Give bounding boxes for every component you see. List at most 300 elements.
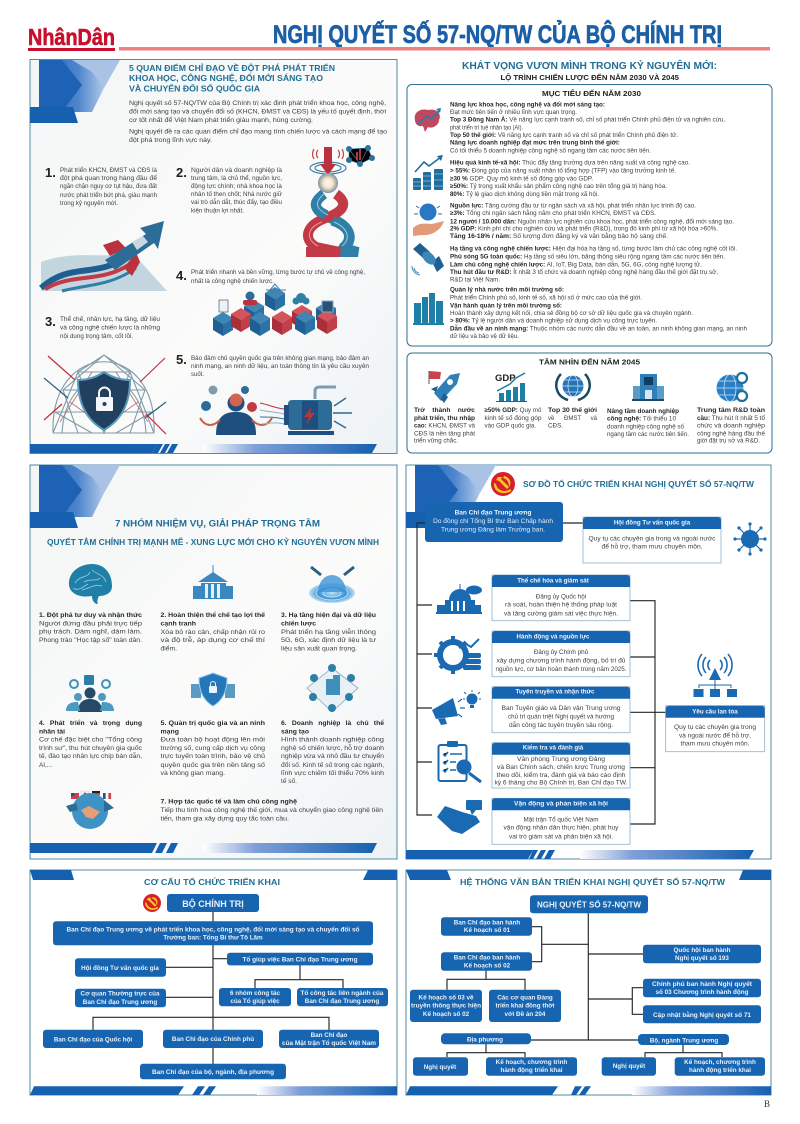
footer banner	[30, 444, 377, 453]
vision 1: Trở thành nước	[414, 407, 476, 414]
illustration: dome shield	[44, 355, 166, 434]
point 1: Phát triển KHCN, ĐMST và CĐS là	[60, 167, 158, 174]
box: Ban Chỉ đạo Trung ương: Ban Chỉ đạo Trung ương về phát triển khoa học, công nghệ, đổi mới sáng tạo và chuyển đổi số	[66, 925, 360, 934]
box: vận động: vận động nhân dân thực hiện, phát huy	[504, 825, 619, 832]
task 3: 5G, 6G, xác định dữ liệu là tư	[281, 637, 376, 644]
vision 2: ≥50% GDP: Quy mô	[484, 407, 542, 414]
point 2	[176, 165, 283, 214]
box: hành động: nguồn lực, cơ bản hoàn thành trong năm 2025.	[496, 664, 627, 673]
point 3: và công nghệ chiến lược là những	[60, 326, 160, 332]
box: kiểm tra: kỳ 6 tháng cho Bộ Chính trị, Ban Chỉ đạo TW.	[494, 778, 628, 786]
box: tuyên truyền	[492, 687, 630, 733]
box: Hội đồng Tư vấn	[75, 958, 166, 977]
text: hạ tầng: Phủ sóng 5G toàn quốc: Hạ tầng số siêu lớn, băng thông siêu rộng ngang tầm các nước tiên tiến.	[450, 253, 725, 260]
box: Các cơ quan Đảng	[489, 990, 561, 1022]
box: tuyên truyền: Ban Tuyên giáo và Dân vận Trung ương	[502, 705, 621, 712]
intro text: cơ tốt nhất để Việt Nam phát triển giàu mạnh, hùng cường.	[129, 115, 313, 124]
box: 6 nhóm công tác: của Tổ giúp việc	[230, 997, 280, 1005]
box: thể chế hóa: và tăng cường giám sát việc thực hiện.	[504, 611, 618, 618]
text: năng lực khoa học: Top 50 thế giới: Về năng lực cạnh tranh số và chỉ số phát triển Chính phủ điện tử.	[450, 132, 678, 139]
box: yêu cầu lan tỏa: và ngoài nước để hỗ trợ,	[679, 731, 751, 740]
point 3: Thể chế, nhân lực, hạ tầng, dữ liệu	[60, 316, 160, 323]
illustration: helix and network	[306, 145, 375, 252]
footer banner	[30, 843, 377, 853]
point 4: nhất là công nghệ chiến lược.	[191, 279, 274, 285]
box: vận động	[492, 798, 630, 844]
box: Bộ ngành Trung ương	[638, 1034, 729, 1045]
card: tầm nhìn 2045	[407, 353, 772, 453]
box: Tổ giúp việc	[227, 953, 373, 965]
box: kiểm tra: Văn phòng Trung ương Đảng	[517, 756, 606, 763]
point 3	[45, 314, 160, 340]
heading: tầm nhìn 2045: TẦM NHÌN ĐẾN NĂM 2045	[539, 356, 640, 366]
text: nguồn lực: 2% GDP: Kinh phí chi cho nghiên cứu và phát triển (R&D), trong đó kinh phí từ xã hội hóa >60%.	[450, 225, 718, 232]
text: nguồn lực: Nguồn lực: Tăng cường đầu tư từ ngân sách và xã hội, phát triển nhân lực trình độ cao.	[450, 202, 696, 209]
box: Hội đồng Tư vấn quốc gia: để hỗ trợ, tham mưu chuyên môn.	[602, 542, 703, 551]
box: Ban Chỉ đạo của Mặt trận	[279, 1030, 379, 1048]
box: Các cơ quan Đảng: triển khai đồng thời	[495, 1001, 555, 1010]
box: Nghị quyết bộ ngành	[602, 1057, 656, 1076]
panel: 7 nhóm nhiệm vụ	[30, 465, 397, 859]
heading: sơ đồ tổ chức: SƠ ĐỒ TỔ CHỨC TRIỂN KHAI NGHỊ QUYẾT SỐ 57-NQ/TW	[523, 479, 755, 489]
task 2: và độ trễ, áp dụng cơ chế thí	[160, 637, 265, 644]
vision 4: doanh nghiệp công nghệ số	[607, 423, 685, 430]
box: Tổ giúp việc: Tổ giúp việc Ban Chỉ đạo Trung ương	[242, 955, 358, 963]
box: Ban Chỉ đạo của Quốc hội: Ban Chỉ đạo của Quốc hội	[54, 1036, 132, 1044]
box: Kế hoạch số 03: Kế hoạch số 03 về	[419, 993, 474, 1002]
point 1	[45, 165, 158, 207]
box: Ban Chỉ đạo của Chính phủ: Ban Chỉ đạo của Chính phủ	[172, 1036, 254, 1043]
icon: handshake	[437, 800, 482, 834]
box: Chính phủ	[643, 979, 761, 997]
box: Bộ ngành Trung ương: Bộ, ngành Trung ương	[650, 1037, 718, 1044]
text: nguồn lực: 12 người / 10.000 dân: Nguồn nhân lực nghiên cứu khoa học, phát triển công nghệ, đổi mới sáng tạo.	[450, 218, 734, 225]
point 2: động lực chính; nhà khoa học là	[191, 184, 283, 190]
task 6	[281, 720, 385, 785]
icon: brain network	[733, 522, 767, 556]
task 7: tiến, tham gia xây dựng quy tắc toàn cầu.	[160, 815, 289, 822]
box: Cơ quan Thường trực	[75, 989, 166, 1007]
text: năng lực khoa học	[450, 102, 725, 154]
point 3: nội dung trọng tâm, cốt lõi.	[60, 334, 133, 340]
box: thể chế hóa: Thể chế hóa và giám sát	[517, 578, 589, 585]
icon: brain growth	[415, 108, 441, 132]
task 6: 6. Doanh nghiệp là chủ thể	[281, 720, 385, 727]
point 5: ninh mạng, an ninh dữ liệu, an toàn thông tin là yêu cầu xuyên	[191, 364, 369, 370]
box: thể chế hóa: Đảng ủy Quốc hội	[536, 591, 586, 600]
task 2: cạnh tranh	[160, 621, 196, 628]
task 1: Phong trào "Học tập số" toàn dân.	[39, 637, 142, 644]
icon: smart city	[413, 293, 444, 325]
heading: 7 nhóm nhiệm vụ: 7 NHÓM NHIỆM VỤ, GIẢI PHÁP TRỌNG TÂM	[115, 518, 320, 530]
icon: people and AI	[66, 675, 114, 712]
text: hiệu quả kinh tế	[450, 160, 690, 198]
box: hành động	[492, 631, 630, 677]
vision 4: ngang tầm các nước tiên tiến.	[607, 431, 689, 438]
box: Quốc hội: Nghị quyết số 193	[675, 954, 729, 962]
box: hành động: Hành động và nguồn lực	[517, 633, 590, 640]
vision 5	[697, 407, 766, 445]
task 5: Đưa toàn bộ hoạt động lên môi	[160, 737, 265, 744]
icon: globe with laurel	[556, 374, 590, 400]
box: tuyên truyền: chủ trì quán triệt Nghị quyết và hướng	[508, 711, 614, 720]
text: hạ tầng: Hạ tầng và công nghệ chiến lược: Hiện đại hóa hạ tầng số, từng bước làm chủ các công nghệ cốt lõi.	[450, 246, 737, 253]
box: Ban Chỉ đạo của Chính phủ	[163, 1030, 263, 1048]
footer banner	[30, 1086, 397, 1095]
box: Chính phủ: Chính phủ ban hành Nghị quyết	[652, 980, 753, 988]
box: Ban Chỉ đạo Trung ương	[53, 921, 373, 945]
task 6: nghiệp vừa và nhỏ đầu tư chuyển	[281, 753, 384, 760]
header: newspaper logo: NhânDân	[28, 24, 115, 50]
point 2: kiện thuận lợi nhất.	[191, 208, 244, 214]
text: hiệu quả kinh tế: Hiệu quả kinh tế-xã hội: Thúc đẩy tăng trưởng dựa trên năng suất và công nghệ cao.	[450, 160, 690, 167]
box: bộ ngành địa phương	[140, 1064, 286, 1079]
text: năng lực khoa học: Top 3 Đông Nam Á: Về năng lực cạnh tranh số, chỉ số phát triển Chính phủ điện tử và nghiên cứu,	[450, 117, 725, 124]
text: nguồn lực	[450, 202, 734, 240]
task 4: nhân tài	[39, 728, 65, 735]
task 7	[160, 798, 383, 822]
vision 4	[607, 408, 689, 438]
task 3: Phát triển hạ tầng viễn thông	[281, 629, 376, 636]
task 6: Hình thành doanh nghiệp công	[281, 737, 384, 744]
task 6: nghệ số chiến lược, hỗ trợ doanh	[281, 745, 384, 752]
box: Tổ công tác liên ngành: Ban Chỉ đạo Trung ương	[305, 998, 379, 1005]
connectors	[93, 912, 343, 1064]
box: Hội đồng Tư vấn quốc gia: Hội đồng Tư vấn quốc gia	[614, 520, 691, 527]
text: hiệu quả kinh tế: ≥50%: Tỷ trọng xuất khẩu sản phẩm công nghệ cao trên tổng giá trị hàng hóa.	[450, 183, 667, 190]
box: vận động: Vận động và phản biện xã hội	[514, 800, 608, 807]
icon: satellite	[412, 243, 444, 275]
task 6: sáng tạo	[281, 728, 309, 735]
text: hạ tầng	[450, 246, 737, 284]
task 1: 1. Đột phá tư duy và nhận thức	[39, 612, 143, 619]
text: quản lý nhà nước: > 80%: Tỷ lệ người dân và doanh nghiệp sử dụng dịch vụ công trực tuyến.	[450, 317, 657, 324]
task 4	[39, 720, 142, 769]
task 5: trực tuyến toàn trình, bảo vệ chủ	[160, 753, 265, 760]
text: nguồn lực: Tăng 16-18% / năm: Số lượng đơn đăng ký và văn bằng bảo hộ sáng chế.	[450, 233, 668, 240]
box: hành động: Đảng ủy Chính phủ	[534, 648, 589, 656]
heading: 5 quan điểm	[129, 62, 335, 94]
box: Tổ công tác liên ngành	[297, 988, 388, 1006]
icon: government building	[193, 565, 233, 599]
heading: cơ cấu tổ chức: CƠ CẤU TỔ CHỨC TRIỂN KHAI	[144, 876, 280, 887]
text: hạ tầng: Làm chủ công nghệ chiến lược: AI, IoT, Big Data, bán dẫn, 5G, 6G, công nghệ lượng tử.	[450, 261, 702, 268]
icon: GDP chart: GDP	[495, 373, 516, 384]
point 2: 2.	[176, 165, 187, 180]
box: vận động: Mặt trận Tổ quốc Việt Nam	[523, 814, 599, 823]
heading: 5 quan điểm: 5 QUAN ĐIỂM CHỈ ĐẠO VỀ ĐỘT PHÁ PHÁT TRIỂN	[129, 62, 335, 73]
task 1	[39, 612, 143, 644]
task 1: Người đứng đầu phải trực tiếp	[39, 620, 143, 627]
task 7: Tiếp thu tinh hoa công nghệ thế giới, mua và chuyển giao công nghệ tiên	[160, 807, 383, 814]
box: Kế hoạch số 01	[441, 917, 532, 936]
vision 3: CĐS.	[548, 423, 563, 430]
task 5: quyền quốc gia trên nền tảng số	[160, 762, 266, 769]
task 2	[160, 612, 266, 653]
box: Ban Chỉ đạo của Quốc hội	[43, 1030, 143, 1048]
box: yêu cầu lan tỏa: Yêu cầu lan tỏa	[692, 708, 738, 715]
box: Cơ quan Thường trực: Ban Chỉ đạo Trung ương	[83, 999, 157, 1006]
text: quản lý nhà nước: Phát triển Chính phủ số, kinh tế số, xã hội số ở mức cao của thế giới.	[450, 294, 642, 301]
vision 3	[548, 407, 598, 430]
vision 1: CĐS là nền tảng phát	[414, 430, 475, 437]
heading: 5 quan điểm: KHOA HỌC, CÔNG NGHỆ, ĐỔI MỚI SÁNG TẠO	[129, 72, 323, 83]
task 5: mạng	[160, 728, 179, 735]
box: Kế hoạch bộ ngành: Kế hoạch, chương trình	[684, 1058, 756, 1066]
box: Ban Chỉ đạo Trung ương: Trung ương Đảng làm Trưởng ban.	[441, 526, 545, 534]
box: Ban Chỉ đạo Trung ương	[425, 502, 563, 542]
panel: 5 quan điểm chỉ đạo	[30, 60, 397, 454]
box: Địa phương	[441, 1033, 531, 1044]
point 2: nhân tố then chốt; Nhà nước giữ	[191, 192, 282, 198]
panel: khát vọng vươn mình	[407, 59, 772, 453]
box: kiểm tra	[492, 743, 630, 788]
task 6: lĩnh vực chiếm tối thiểu 70% kinh	[281, 770, 384, 777]
box: Kế hoạch số 01: Kế hoạch số 01	[464, 926, 511, 934]
text: quản lý nhà nước	[450, 287, 747, 340]
vision 5: cầu: Thu hút ít nhất 5 tổ	[697, 415, 766, 422]
box: Hội đồng Tư vấn: Hội đồng Tư vấn quốc gia	[81, 963, 159, 972]
vision 1	[414, 407, 476, 445]
point 4: Phát triển nhanh và bền vững, từng bước tự chủ về công nghệ,	[191, 269, 365, 276]
icon: clipboard and magnifier	[438, 741, 481, 782]
task 6: đổi số. Kinh tế số trong các ngành,	[281, 762, 384, 769]
vision 5: chức và doanh nghiệp	[697, 423, 766, 430]
box: Kế hoạch địa phương	[486, 1057, 577, 1076]
box: Nghị quyết bộ ngành: Nghị quyết	[613, 1062, 646, 1070]
vision 3: Top 30 thế giới	[548, 407, 597, 414]
text: quản lý nhà nước: Vận hành quản lý trên môi trường số:	[450, 302, 562, 309]
icon: hand holding globe	[413, 204, 444, 236]
box: Ban Chỉ đạo của Mặt trận: Ban Chỉ đạo	[311, 1032, 348, 1039]
box: tuyên truyền: dẫn công tác tuyên truyền sâu rộng.	[509, 720, 613, 729]
task 4: 4. Phát triển và trọng dụng	[39, 720, 142, 727]
box: 6 nhóm công tác: 6 nhóm công tác	[230, 990, 281, 997]
text: quản lý nhà nước: dữ liệu và bảo vệ dữ liệu.	[450, 333, 519, 340]
vision 1: phát triển, thu nhập	[414, 415, 475, 422]
task 4: Cơ chế đặc biệt cho "Tổng công	[39, 737, 142, 744]
box: Ban Chỉ đạo Trung ương: Ban Chỉ đạo Trung ương	[455, 510, 531, 517]
point 5: 5.	[176, 352, 187, 367]
box: Quốc hội	[643, 945, 761, 963]
icon: party emblem	[491, 472, 515, 496]
vision 4: công nghệ: Tối thiểu 10	[607, 416, 677, 422]
box: yêu cầu lan tỏa	[666, 706, 765, 752]
text: quản lý nhà nước: Hoàn thành xây dựng kết nối, chia sẻ đồng bộ cơ sở dữ liệu quốc gia và chuyên ngành.	[450, 310, 693, 317]
connectors	[417, 523, 666, 824]
task 2: Xóa bỏ rào cản, chấp nhận rủi ro	[160, 629, 266, 636]
point 5: Bảo đảm chủ quyền quốc gia trên không gian mạng, bảo đảm an	[191, 355, 369, 362]
box: kiểm tra: Kiểm tra và đánh giá	[523, 745, 584, 752]
box: Cơ quan Thường trực: Cơ quan Thường trực của	[81, 991, 160, 998]
box: 6 nhóm công tác	[219, 988, 291, 1006]
box: Kế hoạch bộ ngành	[675, 1057, 765, 1076]
heading: hệ thống văn bản: HỆ THỐNG VĂN BẢN TRIỂN KHAI NGHỊ QUYẾT SỐ 57-NQ/TW	[460, 876, 726, 887]
point 2: trung tâm, là chủ thể, nguồn lực,	[191, 175, 282, 182]
subheading: lộ trình: LỘ TRÌNH CHIẾN LƯỢC ĐẾN NĂM 2030 VÀ 2045	[500, 72, 679, 82]
illustration: rocket	[41, 221, 167, 291]
task 3: liệu sản xuất quan trọng.	[281, 646, 357, 653]
box: Hội đồng Tư vấn quốc gia: Quy tụ các chuyên gia trong và ngoài nước	[588, 536, 716, 543]
task 5: và không gian mạng.	[160, 770, 225, 777]
box: Kế hoạch số 02: Ban Chỉ đạo ban hành	[454, 954, 520, 961]
point 4	[176, 268, 365, 285]
box: Nghị quyết 57	[530, 895, 648, 913]
point 1: đột phá quan trọng hàng đầu để	[60, 175, 158, 182]
task 2: 2. Hoàn thiện thể chế tạo lợi thế	[160, 612, 266, 619]
box: Kế hoạch số 01: Ban Chỉ đạo ban hành	[454, 919, 520, 926]
vision 1: cao: KHCN, ĐMST và	[414, 423, 476, 430]
connectors	[447, 913, 722, 1057]
vision 5: Trung tâm R&D toàn	[697, 407, 765, 414]
box: kiểm tra: và Ban Chính sách, chiến lược Trung ương	[497, 762, 626, 771]
icon: gear and coins	[434, 636, 481, 674]
panel: hệ thống văn bản	[406, 870, 771, 1095]
vision 3: về ĐMST và	[548, 415, 598, 422]
icon: company building	[632, 374, 664, 401]
text: năng lực khoa học: Năng lực doanh nghiệp đạt mức trên trung bình thế giới:	[450, 140, 620, 147]
box: bộ ngành địa phương: Ban Chỉ đạo của bộ, ngành, địa phương	[152, 1069, 274, 1076]
card: mục tiêu 2030	[407, 84, 772, 346]
icon: parliament	[436, 584, 482, 614]
heading: khát vọng: KHÁT VỌNG VƯƠN MÌNH TRONG KỶ NGUYÊN MỚI:	[462, 59, 717, 72]
heading: 5 quan điểm: VÀ CHUYỂN ĐỔI SỐ QUỐC GIA	[129, 82, 260, 94]
box: Ban Chỉ đạo của Mặt trận: của Mặt trận Tổ quốc Việt Nam	[282, 1039, 376, 1047]
text: nguồn lực: ≥3%: Tổng chi ngân sách hằng năm cho phát triển KHCN, ĐMST và CĐS.	[450, 210, 656, 217]
panel: cơ cấu tổ chức	[30, 870, 397, 1095]
box: Nghị quyết 57: NGHỊ QUYẾT SỐ 57-NQ/TW	[537, 900, 641, 910]
point 3: 3.	[45, 314, 56, 329]
task 1: phụ trách. Dám nghĩ, dám làm.	[39, 629, 142, 636]
task 3: 3. Hạ tầng hiện đại và dữ liệu	[281, 612, 376, 619]
icon: antenna network	[694, 654, 737, 697]
point 1: nước phát triển bứt phá, giàu mạnh	[60, 192, 157, 199]
box: Các cơ quan Đảng: với Đề án 204	[505, 1009, 546, 1018]
box: Cập nhật: Cập nhật bằng Nghị quyết số 71	[653, 1010, 751, 1019]
box: tuyên truyền: Tuyên truyền và nhận thức	[516, 689, 595, 696]
point 4: 4.	[176, 268, 187, 283]
text: hiệu quả kinh tế: > 55%: Đóng góp của năng suất nhân tố tổng hợp (TFP) vào tăng trưởng kinh tế.	[450, 168, 676, 175]
text: hiệu quả kinh tế: 80%: Tỷ lệ giao dịch không dùng tiền mặt trong xã hội.	[450, 191, 599, 198]
box: vận động: vai trò giám sát và phản biện xã hội.	[509, 834, 613, 841]
text: năng lực khoa học: Đạt mức tiên tiến ở nhiều lĩnh vực quan trọng.	[450, 109, 577, 116]
box: Kế hoạch số 03: Kế hoạch số 02	[423, 1010, 470, 1018]
box: Ban Chỉ đạo Trung ương: Do đồng chí Tổng Bí thư Ban Chấp hành	[433, 516, 554, 525]
box: Chính phủ: số 03 Chương trình hành động	[656, 988, 749, 996]
task 3	[281, 612, 376, 653]
box: Quốc hội: Quốc hội ban hành	[673, 946, 731, 954]
box: Kế hoạch số 02: Kế hoạch số 02	[464, 961, 511, 969]
vision 2: vào GDP quốc gia.	[484, 423, 536, 430]
vision 5: công nghệ hàng đầu thế	[697, 430, 766, 437]
icon: globe handshake and flags	[66, 791, 114, 829]
vision 1: triển vững chắc.	[414, 438, 458, 445]
icon: satellites and data hub	[309, 567, 355, 603]
icon: party emblem	[143, 894, 161, 912]
box: Các cơ quan Đảng: Các cơ quan Đảng	[497, 995, 553, 1002]
point 2: vai trò dẫn dắt, thúc đẩy, tạo điều	[191, 199, 282, 206]
box: Kế hoạch số 03: truyền thông thực hiện	[411, 1001, 481, 1010]
box: Nghị quyết địa phương	[413, 1057, 468, 1076]
illustration: building blocks	[213, 284, 337, 336]
task 5: trường số, cung cấp dịch vụ công	[160, 745, 265, 752]
box: thể chế hóa	[492, 575, 630, 621]
box: Ban Chỉ đạo Trung ương: Trưởng ban: Tổng Bí thư Tô Lâm	[163, 934, 263, 942]
box: Kế hoạch bộ ngành: hành động triển khai	[689, 1066, 751, 1074]
icon: coins and growth	[413, 155, 443, 190]
illustration: mind and motor	[200, 386, 352, 435]
text: quản lý nhà nước: Dẫn đầu về an ninh mạng: Thuộc nhóm các nước dẫn đầu về an toàn, an ninh không gian mạng, an ninh	[450, 325, 747, 332]
vision 2: kinh tế số đóng góp	[484, 415, 542, 422]
box: yêu cầu lan tỏa: tham mưu chuyên môn.	[680, 741, 750, 748]
icon: globe and gears	[716, 373, 747, 402]
icon: enterprise network	[307, 664, 358, 712]
point 2: Người dân và doanh nghiệp là	[191, 168, 283, 174]
text: quản lý nhà nước: Quản lý nhà nước trên môi trường số:	[450, 287, 564, 294]
box: Tổ công tác liên ngành: Tổ công tác liên ngành của	[300, 989, 384, 997]
box: yêu cầu lan tỏa: Quy tụ các chuyên gia trong	[674, 724, 757, 731]
panel: sơ đồ tổ chức	[406, 465, 771, 859]
task 4: tế, đào tạo nhân lực chíp bán dẫn,	[39, 753, 142, 760]
page marker: B	[764, 1099, 770, 1109]
point 1: 1.	[45, 165, 56, 180]
icon: security shield	[191, 673, 235, 706]
box: Cập nhật	[643, 1005, 761, 1023]
text: hạ tầng: R&D tại Việt Nam.	[450, 277, 500, 284]
task 3: chiến lược	[281, 621, 317, 628]
icon: megaphone and bulb	[432, 690, 481, 725]
icon: brain	[69, 564, 112, 604]
icon: GDP chart	[495, 373, 527, 402]
box: Bộ Chính trị	[167, 894, 259, 912]
task 5	[160, 720, 266, 777]
box: hành động: xây dựng chương trình hành động, bố trí đủ	[496, 656, 626, 665]
intro text: đột phá trong lĩnh vực này.	[129, 137, 212, 144]
vision 5: giới đặt trụ sở và R&D.	[697, 438, 760, 445]
footer banner	[406, 850, 754, 859]
task 7: 7. Hợp tác quốc tế và làm chủ công nghệ	[160, 798, 298, 805]
intro text: đổi mới sáng tạo và chuyển đổi số (KHCN, ĐMST và CĐS) là yếu tố quyết định, thời	[129, 106, 386, 115]
box: Kế hoạch số 02	[441, 952, 532, 971]
point 1: ngăn chặn nguy cơ tụt hậu, đưa đất	[60, 184, 157, 190]
point 5	[176, 352, 369, 378]
box: kiểm tra: theo dõi, kiểm tra, đánh giá và báo cáo định	[496, 771, 626, 779]
text: hiệu quả kinh tế: ≥30 % GDP: Quy mô kinh tế số đóng góp vào GDP.	[450, 175, 593, 182]
intro text: Nghị quyết số 57-NQ/TW của Bộ Chính trị xác định phát triển khoa học, công nghệ,	[129, 98, 386, 107]
box: thể chế hóa: rà soát, hoàn thiện hệ thống pháp luật	[505, 600, 617, 609]
intro text: Nghị quyết đề ra các quan điểm chỉ đạo mang tính chiến lược và cách mạng để tạo	[129, 126, 387, 136]
task 5: 5. Quản trị quốc gia và an ninh	[160, 720, 265, 727]
task 6: tế số.	[281, 778, 297, 785]
text: năng lực khoa học: phát triển trí tuệ nhân tạo (AI).	[450, 124, 523, 131]
task 4: trình sư", thu hút chuyên gia quốc	[39, 745, 142, 752]
task 4: AI,...	[39, 762, 52, 769]
box: Kế hoạch địa phương: hành động triển khai	[501, 1066, 563, 1074]
box: Kế hoạch địa phương: Kế hoạch, chương trình	[496, 1058, 567, 1066]
text: năng lực khoa học: Có tối thiểu 5 doanh nghiệp công nghệ số ngang tầm các nước tiên tiến.	[450, 147, 651, 154]
vision 4: Nâng tầm doanh nghiệp	[607, 408, 679, 415]
point 1: trong kỷ nguyên mới.	[60, 200, 118, 207]
vision 2	[484, 407, 542, 430]
intro text	[129, 98, 387, 144]
box: Kế hoạch số 03	[410, 990, 482, 1022]
footer banner	[406, 1086, 771, 1095]
point 5: suốt.	[191, 372, 204, 378]
box: Nghị quyết địa phương: Nghị quyết	[424, 1063, 457, 1071]
subheading: quyết tâm chính trị: QUYẾT TÂM CHÍNH TRỊ MẠNH MẼ - XUNG LỰC MỚI CHO KỶ NGUYÊN VƯƠN MÌNH	[47, 537, 379, 547]
header rule	[119, 47, 770, 50]
text: năng lực khoa học: Năng lực khoa học, công nghệ và đổi mới sáng tạo:	[450, 102, 605, 109]
